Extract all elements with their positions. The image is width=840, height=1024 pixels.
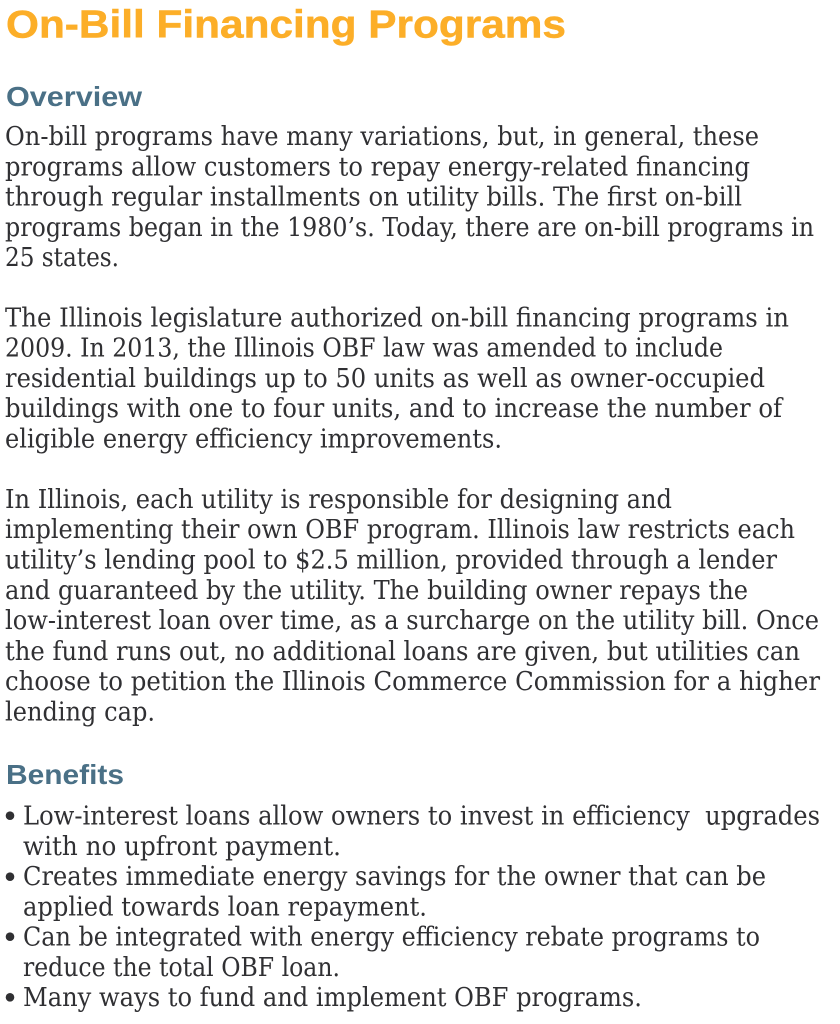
text block: overview paragraph 1	[5, 122, 814, 273]
text block: overview paragraph 1: On-bill programs have many variations, but, in general, these	[5, 122, 759, 152]
heading: benefits: Benefits	[6, 759, 124, 790]
text block: overview paragraph 2: buildings with one to four units, and to increase the number of	[5, 394, 784, 424]
text block: overview paragraph 2: 2009. In 2013, the Illinois OBF law was amended to include	[5, 334, 723, 364]
text block: overview paragraph 3: utility’s lending pool to $2.5 million, provided through a lender	[5, 546, 778, 576]
heading: overview: Overview	[6, 81, 142, 112]
list: benefits: Many ways to fund and implement OBF programs.	[23, 983, 642, 1013]
text block: overview paragraph 1: 25 states.	[5, 243, 119, 273]
text block: overview paragraph 3: and guaranteed by the utility. The building owner repays the	[5, 576, 748, 606]
list: benefits: reduce the total OBF loan.	[23, 953, 340, 983]
text block: overview paragraph 3: In Illinois, each utility is responsible for designing and	[5, 485, 672, 515]
text block: overview paragraph 2: eligible energy efficiency improvements.	[5, 425, 502, 455]
text block: overview paragraph 2: residential buildings up to 50 units as well as owner-occupied	[5, 364, 765, 394]
text block: overview paragraph 3	[5, 485, 821, 728]
text block: overview paragraph 1: through regular installments on utility bills. The first on-bill	[5, 183, 742, 213]
list: benefits: Can be integrated with energy efficiency rebate programs to	[23, 923, 760, 953]
list: benefits: Creates immediate energy savings for the owner that can be	[23, 862, 766, 892]
list: benefits	[6, 802, 820, 1013]
text block: overview paragraph 2	[5, 304, 789, 455]
list: benefits: with no upfront payment.	[23, 832, 341, 862]
list: benefits: applied towards loan repayment.	[23, 893, 427, 923]
text block: overview paragraph 3: lending cap.	[5, 698, 155, 728]
text block: overview paragraph 3: implementing their own OBF program. Illinois law restricts each	[5, 515, 795, 545]
text block: overview paragraph 2: The Illinois legislature authorized on-bill financing programs in	[5, 304, 789, 334]
text block: overview paragraph 1: programs allow customers to repay energy-related financing	[5, 152, 750, 182]
title: On-Bill Financing Programs	[6, 4, 566, 46]
text block: overview paragraph 3: the fund runs out, no additional loans are given, but utilities can	[5, 637, 800, 667]
